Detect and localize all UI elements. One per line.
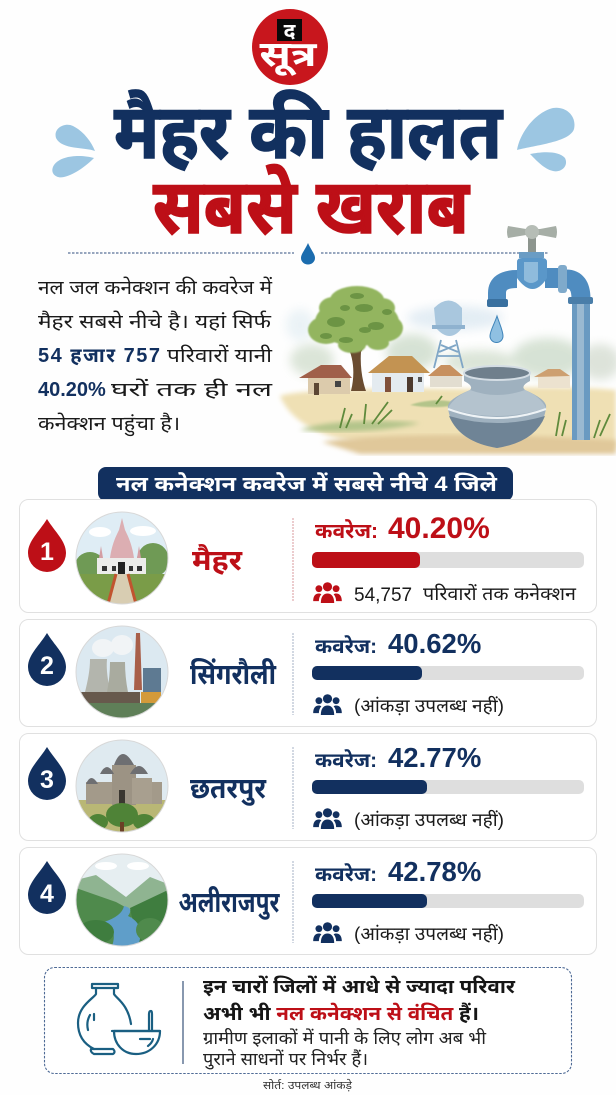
coverage value: कवरेज: (315, 519, 378, 543)
callout: summary (44, 968, 572, 1074)
logo: The Sootr: सूत्र (260, 35, 318, 76)
coverage value: 40.20% (388, 512, 490, 545)
panel: rank 2 Singrauli (20, 620, 596, 726)
coverage value: कवरेज: (315, 748, 377, 772)
icon: rank drop 2 (28, 633, 66, 686)
callout headline (203, 975, 515, 1025)
coverage value (315, 628, 481, 659)
source note: सोर्त: उपलब्ध आंकड़े (263, 1079, 352, 1092)
panel: rank 3 Chhatarpur (20, 734, 596, 840)
falling drop (490, 316, 503, 343)
background haze (286, 306, 616, 380)
pipe (572, 303, 590, 440)
icon: people (313, 922, 342, 943)
icon: rank drop 3 (28, 747, 66, 800)
icon: people (313, 694, 342, 715)
callout headline: अभी भी नल कनेक्शन से वंचित हैं। (203, 1002, 479, 1025)
intro text: 40.20% (38, 379, 106, 401)
logo: The Sootr: द (284, 20, 297, 43)
coverage value: 40.62% (388, 628, 481, 659)
intro text: नल जल कनेक्शन की कवरेज में (38, 276, 272, 299)
icon: rank drop 1 (28, 519, 66, 572)
coverage bar (312, 780, 584, 794)
callout body text: ग्रामीण इलाकों में पानी के लिए लोग अब भी (203, 1027, 486, 1048)
houses (299, 356, 570, 395)
district name: सिंगरौली (190, 658, 276, 691)
illustration: village, water pot and tap (280, 225, 616, 454)
faucet (497, 278, 581, 300)
image: Alirajpur river valley (76, 854, 168, 946)
households text: परिवारों तक कनेक्शन (423, 583, 577, 604)
callout body text (203, 1027, 486, 1071)
section heading pill: नल कनेक्शन कवरेज में सबसे नीचे 4 जिले (116, 472, 498, 496)
water tower (432, 300, 465, 368)
intro text (38, 276, 273, 437)
icon: people (313, 808, 342, 829)
intro text: घरों तक ही नल (111, 378, 273, 401)
households text (354, 583, 577, 606)
intro text: कनेक्शन पहुंचा है। (38, 412, 180, 437)
coverage bar (312, 894, 584, 908)
tap handle (528, 236, 536, 252)
icon: right water splash (517, 108, 574, 171)
data unavailable text: (आंकड़ा उपलब्ध नहीं) (354, 695, 504, 716)
coverage value: 42.78% (388, 856, 481, 887)
icon: rank drop 3: 3 (40, 766, 54, 794)
data unavailable text: (आंकड़ा उपलब्ध नहीं) (354, 923, 504, 944)
icon: rank drop 2: 2 (40, 652, 54, 680)
title line 2: सबसे खराब (153, 165, 471, 250)
coverage value (315, 512, 490, 545)
coverage value: कवरेज: (315, 634, 377, 658)
coverage bar (312, 552, 584, 568)
icon: water vessel and bowl (78, 984, 160, 1054)
panel: rank 1 Maihar (20, 500, 596, 612)
intro text: 54 हजार 757 (38, 345, 160, 367)
intro text: मैहर सबसे नीचे है। यहां सिर्फ (38, 310, 272, 333)
image: Singrauli power plant (76, 626, 168, 718)
coverage bar (312, 666, 584, 680)
title divider with drop (68, 243, 548, 265)
icon: left water splash (52, 125, 95, 177)
section heading pill (98, 467, 513, 501)
district name: अलीराजपुर (178, 886, 280, 920)
coverage value: 42.77% (388, 742, 481, 773)
callout headline: इन चारों जिलों में आधे से ज्यादा परिवार (203, 975, 515, 998)
icon: rank drop 1: 1 (40, 538, 54, 566)
tree (344, 335, 369, 391)
icon: rank drop 4 (28, 861, 66, 914)
households text: 54,757 (354, 585, 412, 606)
intro text: परिवारों यानी (167, 344, 273, 367)
panel: rank 4 Alirajpur (20, 848, 596, 954)
title line 1: मैहर की हालत (114, 89, 504, 175)
data unavailable text: (आंकड़ा उपलब्ध नहीं) (354, 809, 504, 830)
water pot (448, 366, 546, 448)
callout body text: पुराने साधनों पर निर्भर हैं। (203, 1048, 368, 1071)
coverage value: कवरेज: (315, 862, 377, 886)
image: Chhatarpur palace (76, 740, 168, 832)
icon: rank drop 4: 4 (40, 880, 54, 908)
ground (280, 387, 616, 450)
district name: मैहर (192, 544, 243, 577)
district name: छतरपुर (190, 773, 267, 806)
icon: people (313, 582, 342, 603)
coverage value (315, 742, 481, 773)
logo: The Sootr (252, 9, 328, 85)
coverage value (315, 856, 481, 887)
grass (340, 396, 610, 438)
image: Maihar temple (75, 512, 169, 604)
